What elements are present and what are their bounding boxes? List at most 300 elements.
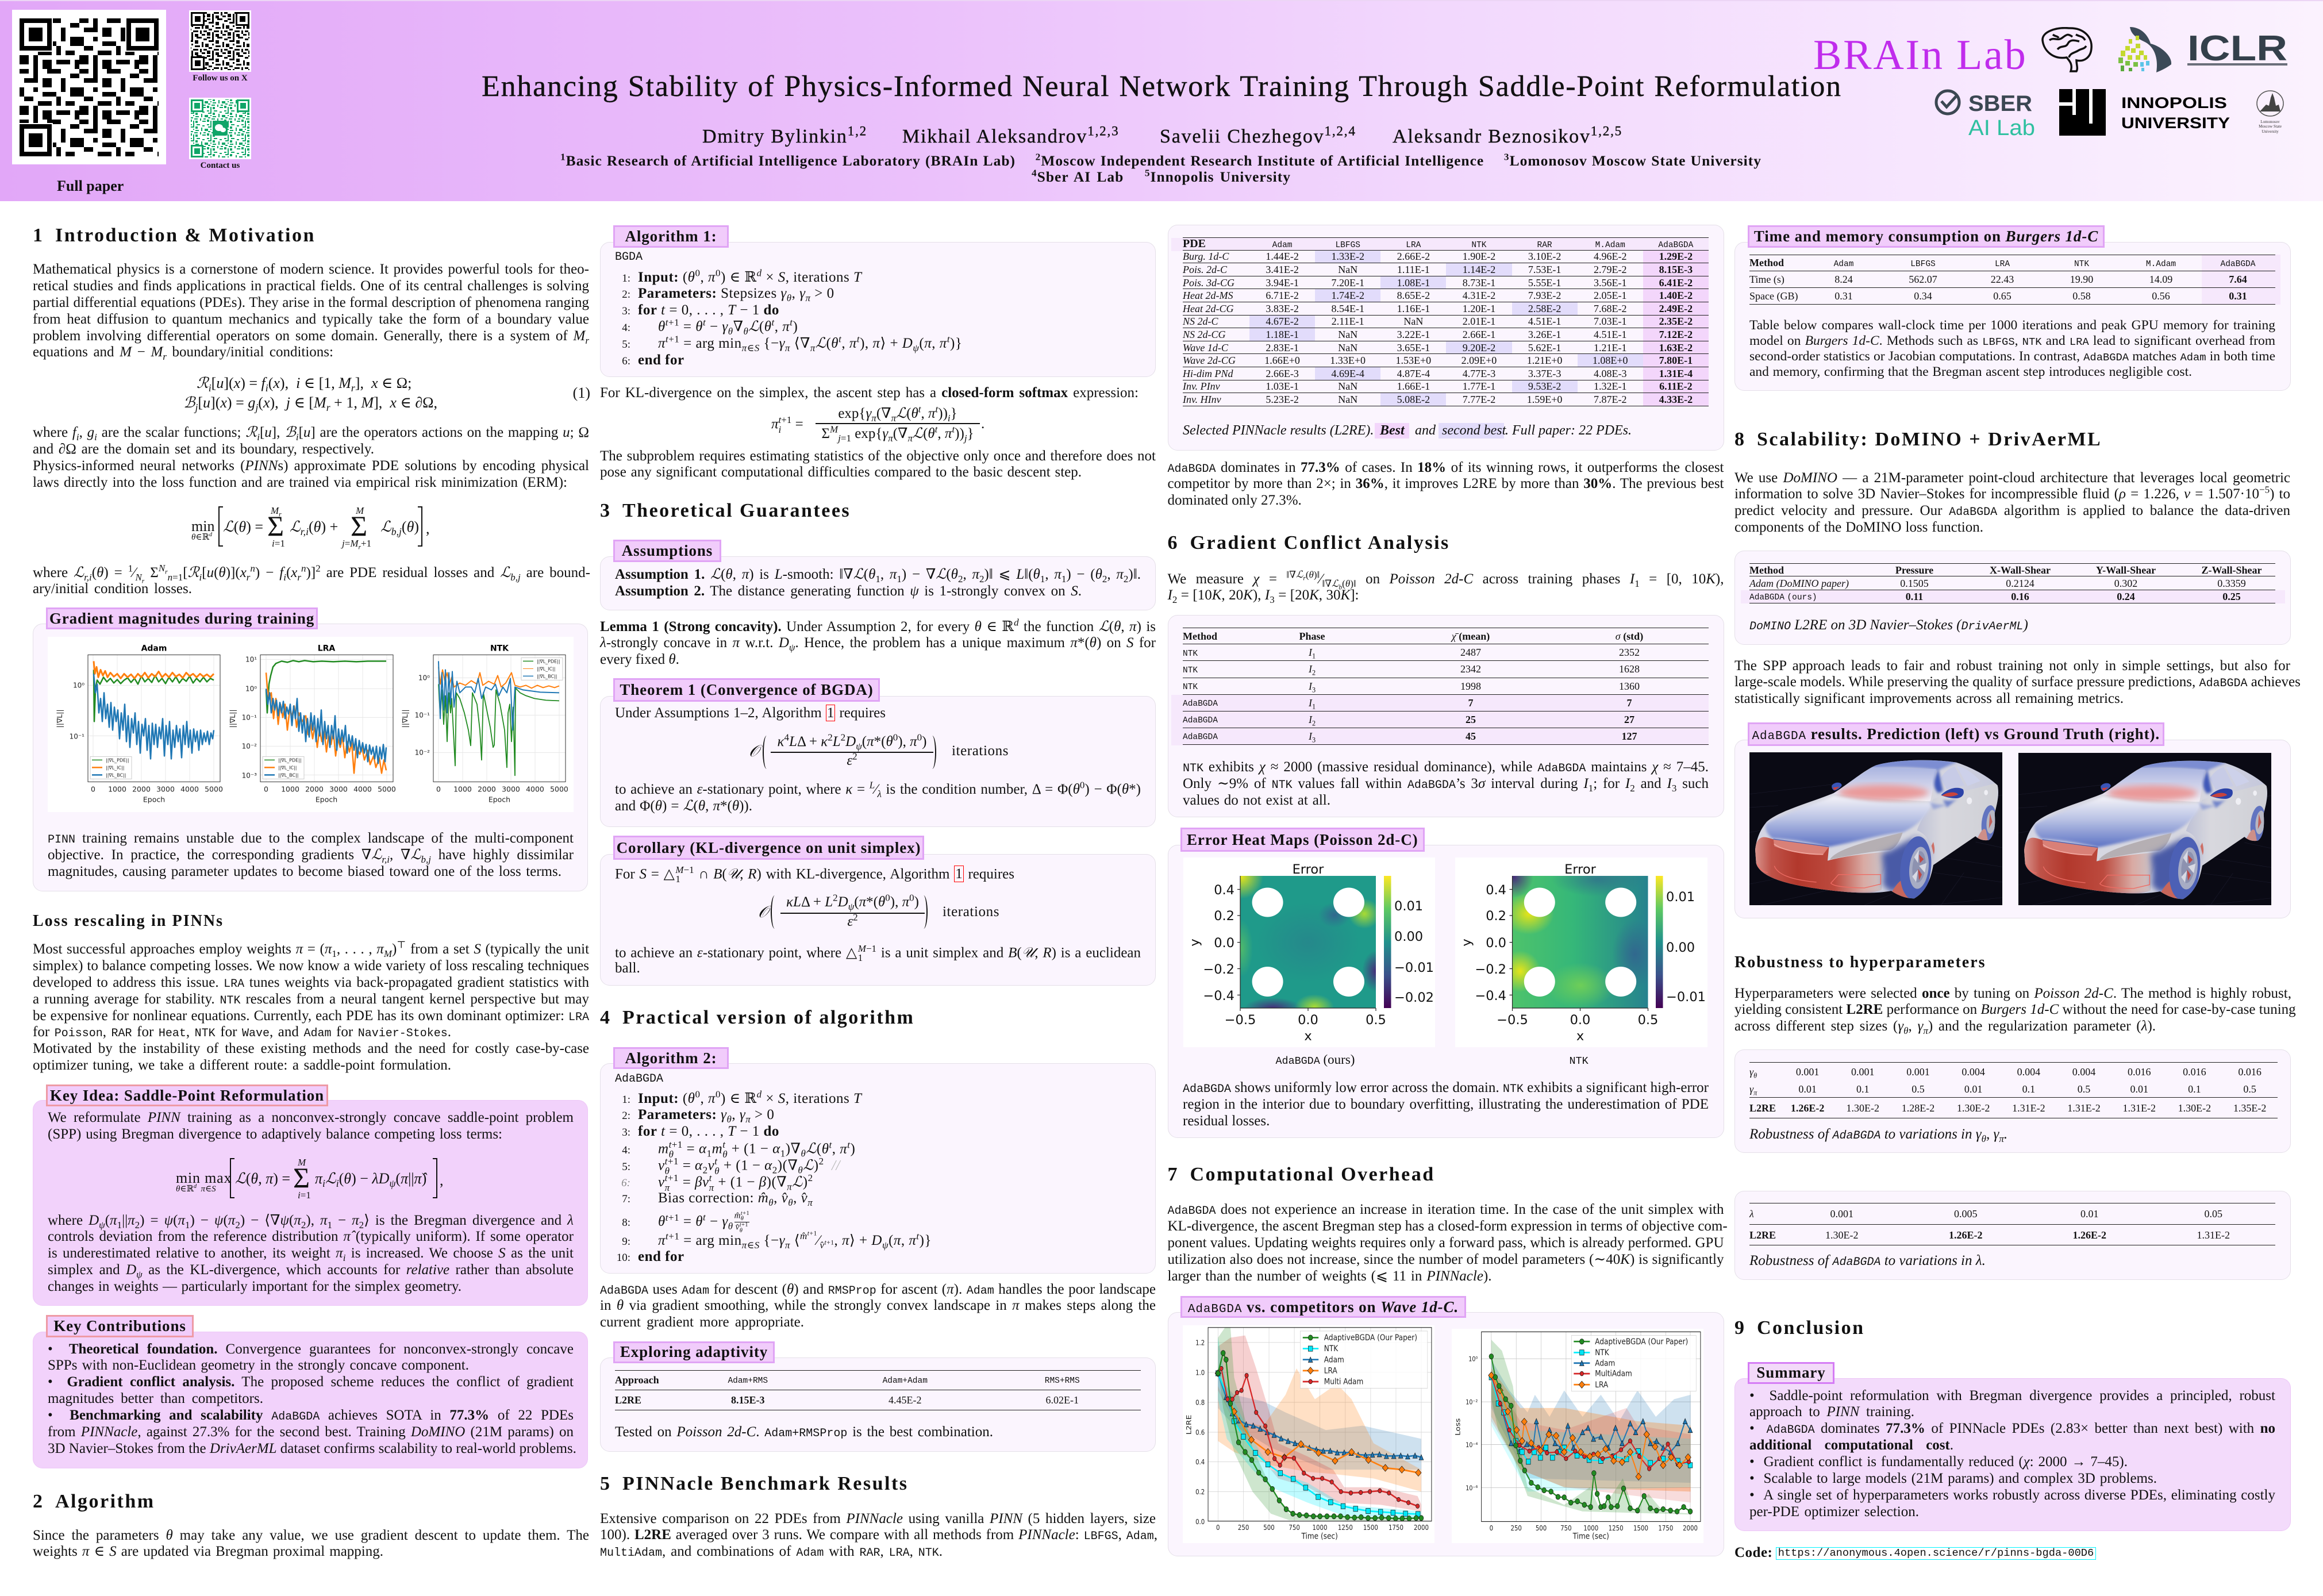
- algorithm steps: 6:: [621, 1177, 630, 1189]
- chart: gradient norm curves: 10⁻²: [242, 742, 257, 750]
- table caption with colour legend: Selected PINNacle results (L2RE).: [1183, 423, 1374, 438]
- table: chi statistics: NTK: [1183, 666, 1198, 675]
- caption: follow us on X: Follow us on X: [193, 74, 248, 83]
- table caption with colour legend: Best: [1380, 423, 1405, 438]
- text: overhead discussion: utilization also does not increase, since the number of model parameters (∼40K) is significantly: [1168, 1252, 1724, 1267]
- table: PINNacle results: 1.74E-2: [1331, 290, 1364, 301]
- table: adaptivity: [615, 1370, 1141, 1410]
- table: step size sweep: 0.016: [2128, 1066, 2151, 1077]
- section heading: 8 Scalability: 8 Scalability: DoMINO + DrivAerML: [1734, 429, 2102, 450]
- table: time and memory: 0.65: [1993, 290, 2012, 302]
- chart: heat maps: −0.01: [1666, 990, 1706, 1005]
- chart: gradient norm curves: 4000: [526, 784, 544, 793]
- chart: gradient norm curves: 10⁻¹: [415, 711, 430, 719]
- text: Bregman divergence: controls deviation from the reference distribution π̂ (typically uniform). If some operator: [48, 1229, 574, 1244]
- equation: ERM: ,: [426, 520, 430, 537]
- table: DoMINO L2RE: 0.3359: [2217, 578, 2246, 589]
- chart: L2RE over time: 1000: [1312, 1524, 1327, 1532]
- table: PINNacle results: 1.33E-2: [1331, 251, 1364, 262]
- chart: gradient norm curves: 1000: [453, 784, 472, 793]
- panel heading: Exploring adaptivity: [620, 1343, 768, 1360]
- chart: heat maps: [1183, 857, 1707, 1047]
- affiliations: 1Basic Research of Artificial Intelligence Laboratory (BRAIn Lab) 2Moscow Independent Research Institute of Artificial Intelligence 3Lomonosov Moscow State University: [560, 152, 1762, 169]
- algorithm step 9: [600, 1232, 932, 1249]
- panel: DoMINO results table: [1734, 551, 2291, 645]
- panel heading: [613, 540, 721, 562]
- table: chi statistics: AdaBGDA: [1183, 699, 1218, 709]
- table: PINNacle results: Heat 2d-MS: [1183, 290, 1233, 301]
- text: intro paragraph: Mathematical physics is a cornerstone of modern science. It provides powerful tools for theo-: [33, 261, 589, 277]
- title: Enhancing Stability of Physics-Informed Neural Network Training Through Saddle-Point Reformulation: [482, 70, 1842, 103]
- table: time and memory: LBFGS: [1910, 260, 1936, 269]
- table: step size sweep: 0.016: [2183, 1066, 2206, 1077]
- text: stationary point: and Φ(θ) = ℒ(θ, π*(θ)).: [615, 798, 752, 814]
- table: PINNacle results: 1.66E+0: [1264, 355, 1300, 366]
- table: PINNacle results: 5.08E-2: [1397, 394, 1430, 405]
- text: chart commentary: magnitudes, causing parameter updates to become biased toward one of the loss terms.: [48, 864, 561, 879]
- chart: heat maps: 0.2: [1214, 909, 1234, 924]
- table: PINNacle results: 1.40E-2: [1659, 290, 1693, 301]
- table: time and memory: 0.58: [2072, 290, 2091, 302]
- table: DoMINO L2RE: 0.25: [2222, 591, 2241, 602]
- equation: softmax update: π =: [771, 417, 803, 432]
- algorithm steps: π: [665, 1182, 670, 1193]
- chart: heat maps: y: [1459, 939, 1474, 947]
- chart: gradient norm curves: NTK: [490, 644, 509, 653]
- table: time and memory: [1749, 255, 2275, 305]
- chart: gradient norm curves: ||∇L_BC||: [106, 772, 126, 778]
- panel heading: [1180, 828, 1424, 852]
- text: robustness: yielding consistent L2RE performance on Burgers 1d-C without the need for case-by-case tuning: [1734, 1002, 2296, 1017]
- equation: saddle-point problem: πiℒi(θ) − λDψ(π||π̂): [315, 1170, 426, 1189]
- text: time and memory commentary: model on Burgers 1d-C. Methods such as LBFGS, NTK and LRA lead to significant overhead from: [1749, 333, 2275, 348]
- logo: Innopolis University: [2059, 89, 2232, 137]
- table: lambda sweep: 0.05: [2205, 1208, 2222, 1220]
- algorithm steps: 6:: [622, 355, 630, 367]
- chart: gradient norm curves: ||∇L||: [401, 709, 409, 728]
- table: DoMINO L2RE: 0.2124: [2006, 578, 2034, 589]
- panel: gradient conflict table: [1168, 615, 1724, 817]
- table: PINNacle results: LBFGS: [1335, 241, 1360, 250]
- chart: gradient norm curves: 10⁰: [73, 681, 84, 689]
- algorithm steps: 3:: [622, 1126, 630, 1139]
- table: step size sweep: γθ: [1749, 1066, 1757, 1079]
- table: step size sweep: 0.1: [2022, 1083, 2035, 1094]
- table: PINNacle results: Adam: [1272, 241, 1292, 250]
- table: PINNacle results: 1.77E-1: [1463, 380, 1495, 392]
- table: lambda sweep: 0.001: [1830, 1208, 1853, 1220]
- text: time and memory commentary: second-order statistics or Jacobian computations. In contrast, AdaBGDA matches Adam in both time: [1749, 349, 2275, 364]
- table: DoMINO L2RE: X-Wall-Shear: [1990, 564, 2051, 576]
- table: chi statistics: 45: [1466, 730, 1476, 742]
- header banner: [0, 0, 2323, 201]
- table: PINNacle results: Inv. HInv: [1183, 394, 1221, 405]
- text: heat map commentary: AdaBGDA shows uniformly low error across the domain. NTK exhibits a significant high-error: [1183, 1080, 1709, 1096]
- QR code: full paper: [12, 10, 166, 164]
- chart: L2RE over time: L2RE: [1185, 1415, 1193, 1435]
- table: PINNacle results: 4.77E-3: [1463, 368, 1495, 379]
- table: PINNacle results: NaN: [1338, 380, 1357, 392]
- table: PINNacle results: AdaBGDA: [1658, 241, 1693, 250]
- chart: heat maps: x: [1576, 1029, 1584, 1044]
- text: Bregman divergence: where Dψ(π1||π2) = ψ(π1) − ψ(π2) − ⟨∇ψ(π2), π1 − π2⟩ is the Bregman divergence and λ: [48, 1213, 574, 1230]
- table: chi statistics: NTK: [1183, 683, 1198, 692]
- text: overhead discussion: ponent values. Updating weights requires only a forward pass, which is already performed. GPU: [1168, 1235, 1724, 1251]
- table: PINNacle results: 4.51E-1: [1594, 329, 1626, 340]
- panel heading: Error Heat Maps (Poisson 2d-C): [1187, 831, 1418, 848]
- logo: Moscow State University: [2253, 90, 2287, 137]
- table: chi statistics: 127: [1622, 730, 1637, 742]
- table: step size sweep: 1.30E-2: [2178, 1102, 2211, 1114]
- table: DoMINO L2RE: Adam (DoMINO paper): [1749, 578, 1849, 589]
- table caption with colour legend: second best: [1442, 423, 1506, 438]
- algorithm step 8: [600, 1210, 749, 1227]
- chart: heat maps: −0.4: [1475, 989, 1506, 1003]
- equation: saddle-point problem: min max: [176, 1170, 232, 1186]
- table: PINNacle results: 2.66E-3: [1266, 368, 1299, 379]
- chart: heat maps: 0.4: [1486, 883, 1506, 898]
- panel heading: Algorithm 1:: [625, 228, 717, 245]
- table: lambda sweep: λ: [1749, 1208, 1754, 1220]
- table: PINNacle results: 3.65E-1: [1397, 342, 1430, 353]
- panel: algorithm 1: [600, 225, 1156, 377]
- equation: saddle-point problem: Σ: [293, 1162, 310, 1194]
- table: chi statistics: I3: [1309, 680, 1316, 694]
- table: step size sweep: 1.30E-2: [1847, 1102, 1879, 1114]
- table: step size sweep: 0.001: [1796, 1066, 1819, 1077]
- table: DoMINO L2RE: Y-Wall-Shear: [2096, 564, 2156, 576]
- table: time and memory: 19.90: [2070, 274, 2093, 285]
- table: PINNacle results: RAR: [1537, 241, 1552, 250]
- equation: saddle-point problem: θ∈ℝd π∈S: [176, 1183, 216, 1194]
- chart: gradient norm curves: 1000: [281, 784, 299, 793]
- table: DoMINO L2RE: 0.11: [1906, 591, 1923, 602]
- table: PINNacle results: 1.59E+0: [1527, 394, 1562, 405]
- table caption: Robustness of AdaBGDA to variations in γθ, γπ.: [1749, 1126, 2007, 1144]
- text: contributions list: • Theoretical foundation. Convergence guarantees for nonconvex-strongly concave: [48, 1341, 574, 1356]
- equation: softmax update: [770, 405, 984, 443]
- chart: loss over time: AdaptiveBGDA (Our Paper): [1595, 1337, 1688, 1347]
- table: chi statistics: I3: [1309, 730, 1316, 744]
- chart: L2RE over time: 1750: [1389, 1524, 1403, 1532]
- icon: brain: [2041, 27, 2093, 72]
- chart: gradient norm curves: 10⁰: [418, 674, 430, 682]
- chart: loss over time: Loss: [1454, 1418, 1462, 1436]
- algorithm steps: θ: [665, 1166, 670, 1176]
- text: loss rescaling: Most successful approaches employ weights π = (π1, . . . , πM)⊤ from a set S (typically the unit: [33, 940, 589, 959]
- equation: saddle-point problem: ℒ(θ, π) =: [235, 1170, 290, 1187]
- equation 1: ℛi[u](x) = fi(x), i ∈ [1, Mr], x ∈ Ω;: [197, 375, 411, 394]
- equation: softmax update: ΣMj=1 exp{γπ(∇πℒ(θt, πt))j}: [821, 424, 974, 444]
- code link: Code:: [1734, 1545, 1772, 1560]
- chart: heat maps: 0.0: [1214, 936, 1234, 951]
- text: chart commentary: objective. In practice, the corresponding gradients ∇ℒr,i, ∇ℒb,j have highly dissimilar: [48, 847, 574, 865]
- chart: loss over time: Time (sec): [1572, 1532, 1609, 1541]
- table: PINNacle results: 2.35E-2: [1659, 316, 1693, 327]
- chart: gradient norm curves: 2000: [132, 784, 151, 793]
- table: PINNacle results: 7.77E-2: [1463, 394, 1495, 405]
- equation 1: (1): [573, 384, 590, 401]
- table: chi statistics: I2: [1309, 663, 1316, 677]
- authors: [702, 124, 1622, 147]
- text: overhead discussion: AdaBGDA does not experience an increase in iteration time. In the case of the unit simplex with: [1168, 1202, 1724, 1218]
- table: PINNacle results: 4.87E-4: [1397, 368, 1430, 379]
- table: adaptivity: 4.45E-2: [889, 1394, 922, 1406]
- algorithm steps: 1:: [622, 1093, 630, 1106]
- text: DoMINO description: components of the DoMINO loss function.: [1734, 520, 1983, 535]
- chart: L2RE over time: 0.6: [1195, 1429, 1205, 1437]
- table: chi statistics: 7: [1626, 697, 1632, 709]
- text: Bregman divergence: [48, 1213, 574, 1295]
- chart: heat maps: x: [1304, 1029, 1312, 1044]
- table: time and memory: 562.07: [1909, 274, 1937, 285]
- table: PINNacle results: 2.01E-1: [1463, 316, 1495, 327]
- panel: corollary: [600, 836, 1156, 986]
- table: DoMINO L2RE: [1749, 563, 2275, 603]
- table: step size sweep: 1.31E-2: [2122, 1102, 2156, 1114]
- table: step size sweep: 0.5: [2078, 1083, 2090, 1094]
- table: PINNacle results: 3.10E-2: [1528, 251, 1561, 262]
- algorithm steps: 2:: [622, 289, 630, 301]
- algorithm steps: t+1: [665, 1156, 679, 1167]
- text: chart commentary: [48, 830, 574, 880]
- table: time and memory: 0.56: [2152, 290, 2170, 302]
- table: lambda sweep: 1.31E-2: [2197, 1229, 2230, 1240]
- equation: complexity bound: [749, 736, 1013, 769]
- text: contributions list: [48, 1341, 574, 1457]
- equation: ERM: min: [191, 518, 214, 534]
- table: DoMINO L2RE: Method: [1749, 564, 1784, 576]
- table: PINNacle results: Heat 2d-CG: [1183, 303, 1233, 314]
- table: PINNacle results: NS 2d-CG: [1183, 329, 1226, 340]
- table: chi statistics: I2: [1309, 714, 1316, 728]
- subheading: loss rescaling: Loss rescaling in PINNs: [33, 912, 224, 930]
- table: step size sweep: 0.01: [1964, 1083, 1982, 1094]
- text: robustness: Hyperparameters were selected once by tuning on Poisson 2d-C. The method is highly robust,: [1734, 985, 2291, 1001]
- table: PINNacle results: 4.67E-2: [1266, 316, 1299, 327]
- text: benchmark summary: [1168, 460, 1724, 509]
- table: time and memory: Space (GB): [1749, 290, 1798, 302]
- chart: L2RE over time: 0.4: [1195, 1458, 1205, 1466]
- logo: Innopolis University: INNOPOLIS: [2121, 94, 2227, 111]
- table: time and memory: Adam: [1834, 260, 1853, 269]
- authors: Aleksandr Beznosikov1,2,5: [1393, 124, 1622, 147]
- chart: heat maps: 0.0: [1298, 1013, 1318, 1028]
- table: chi statistics: Method: [1183, 630, 1217, 642]
- text: loss rescaling: be expensive for nonlinear equations. Currently, each PDE has its own dominant optimizer: LRA: [33, 1008, 589, 1024]
- equation: ERM: ℒ(θ) =: [223, 518, 263, 535]
- table: chi statistics: [1183, 628, 1709, 745]
- text: loss rescaling: a running average for stability. NTK rescales from a neural tangent kernel perspective but may: [33, 991, 589, 1007]
- table: step size sweep: 1.30E-2: [1957, 1102, 1990, 1114]
- table: PINNacle results: Inv. PInv: [1183, 380, 1220, 392]
- panel heading: Corollary (KL-divergence on unit simplex): [617, 839, 921, 856]
- equation: ERM: [191, 506, 433, 548]
- table: step size sweep: 0.5: [2243, 1083, 2256, 1094]
- table: adaptivity: Adam+Adam: [883, 1376, 928, 1386]
- table: step size sweep: 1.35E-2: [2233, 1102, 2266, 1114]
- algorithm steps: Parameters: γθ, γπ > 0: [638, 1107, 774, 1125]
- table: PINNacle results: Hi-dim PNd: [1183, 368, 1233, 379]
- table: PINNacle results: 3.94E-1: [1266, 277, 1299, 289]
- text: summary list: • Scalable to large models (21M params) and complex 3D problems.: [1749, 1471, 2157, 1486]
- text: contributions list: magnitudes better than competitors.: [48, 1391, 263, 1406]
- chart: gradient norm curves: 10⁻²: [415, 748, 430, 756]
- table: chi statistics: 1360: [1619, 680, 1640, 692]
- table: PINNacle results: 1.21E-1: [1594, 342, 1626, 353]
- chart: heat maps: Error: [1293, 862, 1324, 877]
- table: PINNacle results: 1.21E+0: [1527, 355, 1562, 366]
- panel heading: [613, 1047, 729, 1069]
- section heading: 7 Computational Overhead: 7 Computational Overhead: [1168, 1164, 1435, 1185]
- table: PINNacle results: 1.08E+0: [1593, 355, 1628, 366]
- text: intro paragraph: from heat diffusion to quantum mechanics and typically take the form of a boundary value: [33, 311, 589, 327]
- text: PINN definition: laws directly into the loss function and are trained via empirical risk minimization (ERM):: [33, 475, 567, 490]
- chart: gradient norm curves: 3000: [329, 784, 348, 793]
- table: adaptivity: Approach: [615, 1374, 659, 1386]
- table: PINNacle results: 1.66E-1: [1397, 380, 1430, 392]
- table: PINNacle results: Pois. 3d-CG: [1183, 277, 1234, 289]
- algorithm steps: θ: [722, 1149, 728, 1160]
- chart: loss over time: NTK: [1595, 1348, 1610, 1357]
- table: chi statistics: χ̄ (mean): [1452, 630, 1490, 642]
- table: chi statistics: AdaBGDA: [1183, 733, 1218, 742]
- table: lambda sweep: 0.005: [1954, 1208, 1977, 1220]
- chart: L2RE over time: Adam: [1324, 1355, 1344, 1365]
- table caption with colour legend: and: [1415, 423, 1436, 438]
- algorithm step 10: end for: [638, 1248, 684, 1264]
- chart: gradient norm curves: 5000: [550, 784, 568, 793]
- equation: ERM: Σ: [351, 510, 367, 542]
- algorithm steps: 1:: [622, 272, 630, 284]
- chart: gradient norm curves: 10⁰: [245, 684, 257, 693]
- table: step size sweep: [1749, 1062, 2278, 1118]
- algorithm steps: t: [709, 1172, 712, 1183]
- chart: gradient norm curves: ||∇L_IC||: [106, 765, 124, 770]
- chart: gradient norm curves: LRA: [318, 644, 335, 653]
- chart: heat maps: −0.5: [1225, 1013, 1256, 1028]
- panel heading: Summary: [1756, 1364, 1826, 1381]
- text: conflict measure: [1168, 571, 1724, 604]
- table: time and memory: 7.64: [2229, 274, 2247, 285]
- algorithm steps: 2:: [622, 1110, 630, 1122]
- table: PINNacle results: 2.09E+0: [1462, 355, 1497, 366]
- table: PINNacle results: NaN: [1338, 342, 1357, 353]
- chart: gradient norm curves: 0: [91, 784, 95, 793]
- algorithm steps: Parameters: Stepsizes γθ, γπ > 0: [638, 286, 834, 303]
- equation: softmax update: i: [779, 424, 781, 435]
- text: loss rescaling: developed to address this issue. LRA tunes weights via back-propagated gradient statistics with: [33, 975, 589, 991]
- chart: L2RE over time: NTK: [1324, 1344, 1339, 1354]
- logo: Sber AI Lab: [1934, 89, 2038, 137]
- algorithm steps: Bias correction: m̂θ, v̂θ, v̂π: [658, 1190, 813, 1208]
- table caption with colour legend: . Full paper: 22 PDEs.: [1505, 423, 1632, 438]
- text: contributions list: from PINNacle, against 27.3% for the second best. Training DoMINO (21M params) on: [48, 1424, 574, 1440]
- table: PINNacle results: 3.22E-1: [1397, 329, 1430, 340]
- algorithm steps: v = α2v + (1 − α2)(∇θℒ)2 //: [658, 1156, 840, 1176]
- text: corollary statement: For S = △ ∩ B(𝒰, R) with KL-divergence, Algorithm 1 requires: [615, 866, 1014, 882]
- table: step size sweep: 1.28E-2: [1902, 1102, 1934, 1114]
- equation: ERM: ℒr,i(θ) +: [290, 518, 338, 537]
- equation: ERM: θ∈ℝd: [191, 532, 212, 542]
- chart: gradient norm curves: ||∇L_PDE||: [537, 659, 560, 664]
- text: conflict measure: I2 = [10K, 20K), I3 = [20K, 30K]:: [1168, 587, 1359, 605]
- chart: heat maps: 0.00: [1394, 929, 1423, 944]
- table: PINNacle results: 8.65E-2: [1397, 290, 1430, 301]
- table: lambda sweep: 1.26E-2: [1949, 1229, 1983, 1240]
- text: benchmark summary: AdaBGDA dominates in 77.3% of cases. In 18% of its winning rows, it outperforms the closest: [1168, 460, 1724, 476]
- table: PINNacle results: 2.83E-1: [1266, 342, 1299, 353]
- text: benchmark intro: MultiAdam, and combinations of Adam with RAR, LRA, NTK.: [600, 1544, 943, 1560]
- table: lambda sweep: 1.26E-2: [2072, 1229, 2106, 1240]
- table caption: Robustness of AdaBGDA to variations in λ.: [1749, 1253, 1986, 1269]
- table: step size sweep: γπ: [1749, 1083, 1757, 1097]
- table: time and memory: 0.34: [1914, 290, 1932, 302]
- table: chi statistics: Phase: [1299, 630, 1325, 642]
- text: corollary note: M−1: [858, 943, 876, 954]
- equation: ERM: j=Mr+1: [342, 538, 371, 551]
- table: time and memory: 8.24: [1834, 274, 1853, 285]
- text: PINN definition: [33, 425, 589, 491]
- table: PINNacle results: 4.51E-1: [1528, 316, 1561, 327]
- algorithm steps: πt+1 = arg minπ∈S {−γπ ⟨∇πℒ(θt, πt), π⟩ + Dψ(π, πt)}: [658, 334, 962, 353]
- chart: loss over time: 10⁰: [1468, 1356, 1478, 1363]
- text: Bregman divergence: is underestimated relative to another, its weight πi is increased. We choose S as the unit: [48, 1245, 574, 1263]
- table: PINNacle results: 2.49E-2: [1659, 303, 1693, 314]
- panel heading: Key Idea: Saddle-Point Reformulation: [50, 1086, 324, 1103]
- chart: loss over time: MultiAdam: [1595, 1370, 1632, 1379]
- table: PINNacle results: 6.11E-2: [1659, 380, 1693, 392]
- panel heading: Algorithm 2:: [625, 1049, 717, 1067]
- algorithm steps: for t = 0, . . . , T − 1 do: [638, 1124, 779, 1139]
- equation: ERM: Σ: [267, 510, 284, 542]
- text: key idea intro: [48, 1110, 574, 1143]
- chart: heat maps: 0.00: [1666, 940, 1695, 955]
- algorithm steps: t: [714, 1156, 718, 1167]
- table caption with colour legend: [1183, 422, 1629, 439]
- table: PINNacle results: 5.23E-2: [1266, 394, 1299, 405]
- table: PINNacle results: 5.62E-1: [1528, 342, 1561, 353]
- text: loss rescaling: Motivated by the instability of these existing methods and the need for costly case-by-case: [33, 1041, 589, 1056]
- table: PINNacle results: Wave 2d-CG: [1183, 355, 1236, 366]
- table: step size sweep: 0.016: [2238, 1066, 2262, 1077]
- algorithm step 9: 9:: [622, 1236, 630, 1247]
- table: step size sweep: 1.26E-2: [1791, 1102, 1824, 1114]
- panel: algorithm 2: θ: [740, 1228, 743, 1234]
- chart: gradient norm curves: 0: [264, 784, 268, 793]
- algorithm step 9: πt+1 = arg minπ∈S {−γπ ⟨m̂t+1⁄v̂t+1, π⟩ + Dψ(π, πt)}: [658, 1230, 932, 1251]
- algorithm steps: [600, 269, 962, 369]
- text: loss rescaling: [33, 941, 589, 1074]
- panel heading: Gradient magnitudes during training: [49, 609, 314, 626]
- text: benchmark intro: Extensive comparison on 22 PDEs from PINNacle using vanilla PINN (5 hidden layers, size: [600, 1510, 1156, 1526]
- chart: L2RE over time: AdaptiveBGDA (Our Paper): [1324, 1333, 1417, 1343]
- text: SPP at scale: large-scale models. While preserving the quality of surface pressure predictions, AdaBGDA achieves: [1734, 674, 2301, 690]
- chart: loss over time: [1452, 1329, 1703, 1543]
- text: loss rescaling: optimizer tuning, we take a different route: a saddle-point formulation.: [33, 1057, 451, 1073]
- chart: gradient norm curves: ||∇L_IC||: [278, 765, 297, 770]
- table: PINNacle results: PDE: [1183, 237, 1206, 250]
- table: chi statistics: 27: [1624, 714, 1634, 725]
- algorithm step 8: t+1: [741, 1210, 749, 1216]
- chart: gradient norm curves: 2000: [305, 784, 324, 793]
- chart: gradient norm curves: [48, 637, 574, 812]
- chart: loss over time: 2000: [1683, 1524, 1698, 1532]
- chart: L2RE over time: LRA: [1324, 1367, 1338, 1376]
- equation: corollary bound: [758, 895, 999, 929]
- table: PINNacle results: 8.73E-1: [1463, 277, 1495, 289]
- text: summary list: • Saddle-point reformulation with Bregman divergence provides a principled, robust: [1749, 1388, 2275, 1403]
